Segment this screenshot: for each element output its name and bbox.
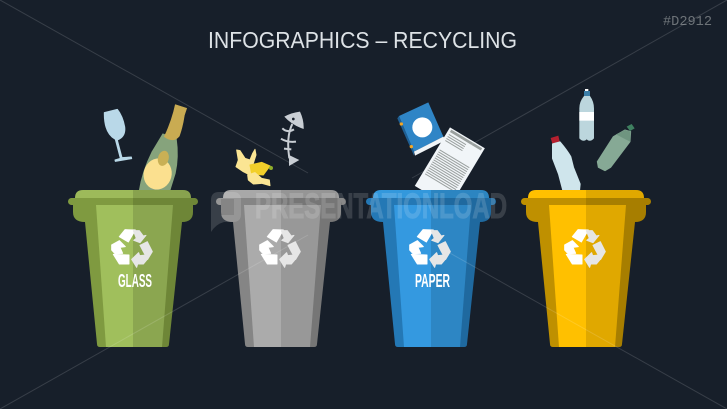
icon: newspaper sheet [415, 127, 485, 207]
label: paper: PAPER [415, 271, 450, 291]
watermark [211, 187, 507, 232]
icon: champagne bottle [139, 105, 187, 193]
icon: fish bone [281, 112, 304, 166]
watermark: PRESENTATIONLOAD [255, 187, 507, 226]
label: glass: GLASS [118, 271, 152, 291]
icon: banana peel [236, 149, 273, 186]
bin: organic [216, 190, 346, 347]
icon: recycling symbol [260, 230, 300, 267]
bin: glass [68, 190, 198, 347]
product code: #D2912 [663, 14, 712, 30]
icon: wine glass [104, 109, 132, 161]
icon: recycling symbol [112, 230, 152, 267]
bin: paper [366, 190, 496, 347]
icon: water bottle upright [579, 89, 594, 141]
title: INFOGRAPHICS – RECYCLING [208, 27, 517, 53]
icon: crushed plastic bottle [551, 136, 580, 192]
icon: recycling symbol [565, 230, 605, 267]
icon: recycling symbol [410, 230, 450, 267]
icon: blue book [397, 102, 446, 156]
bin: plastic [521, 190, 651, 347]
icon: green plastic bottle [597, 124, 635, 171]
